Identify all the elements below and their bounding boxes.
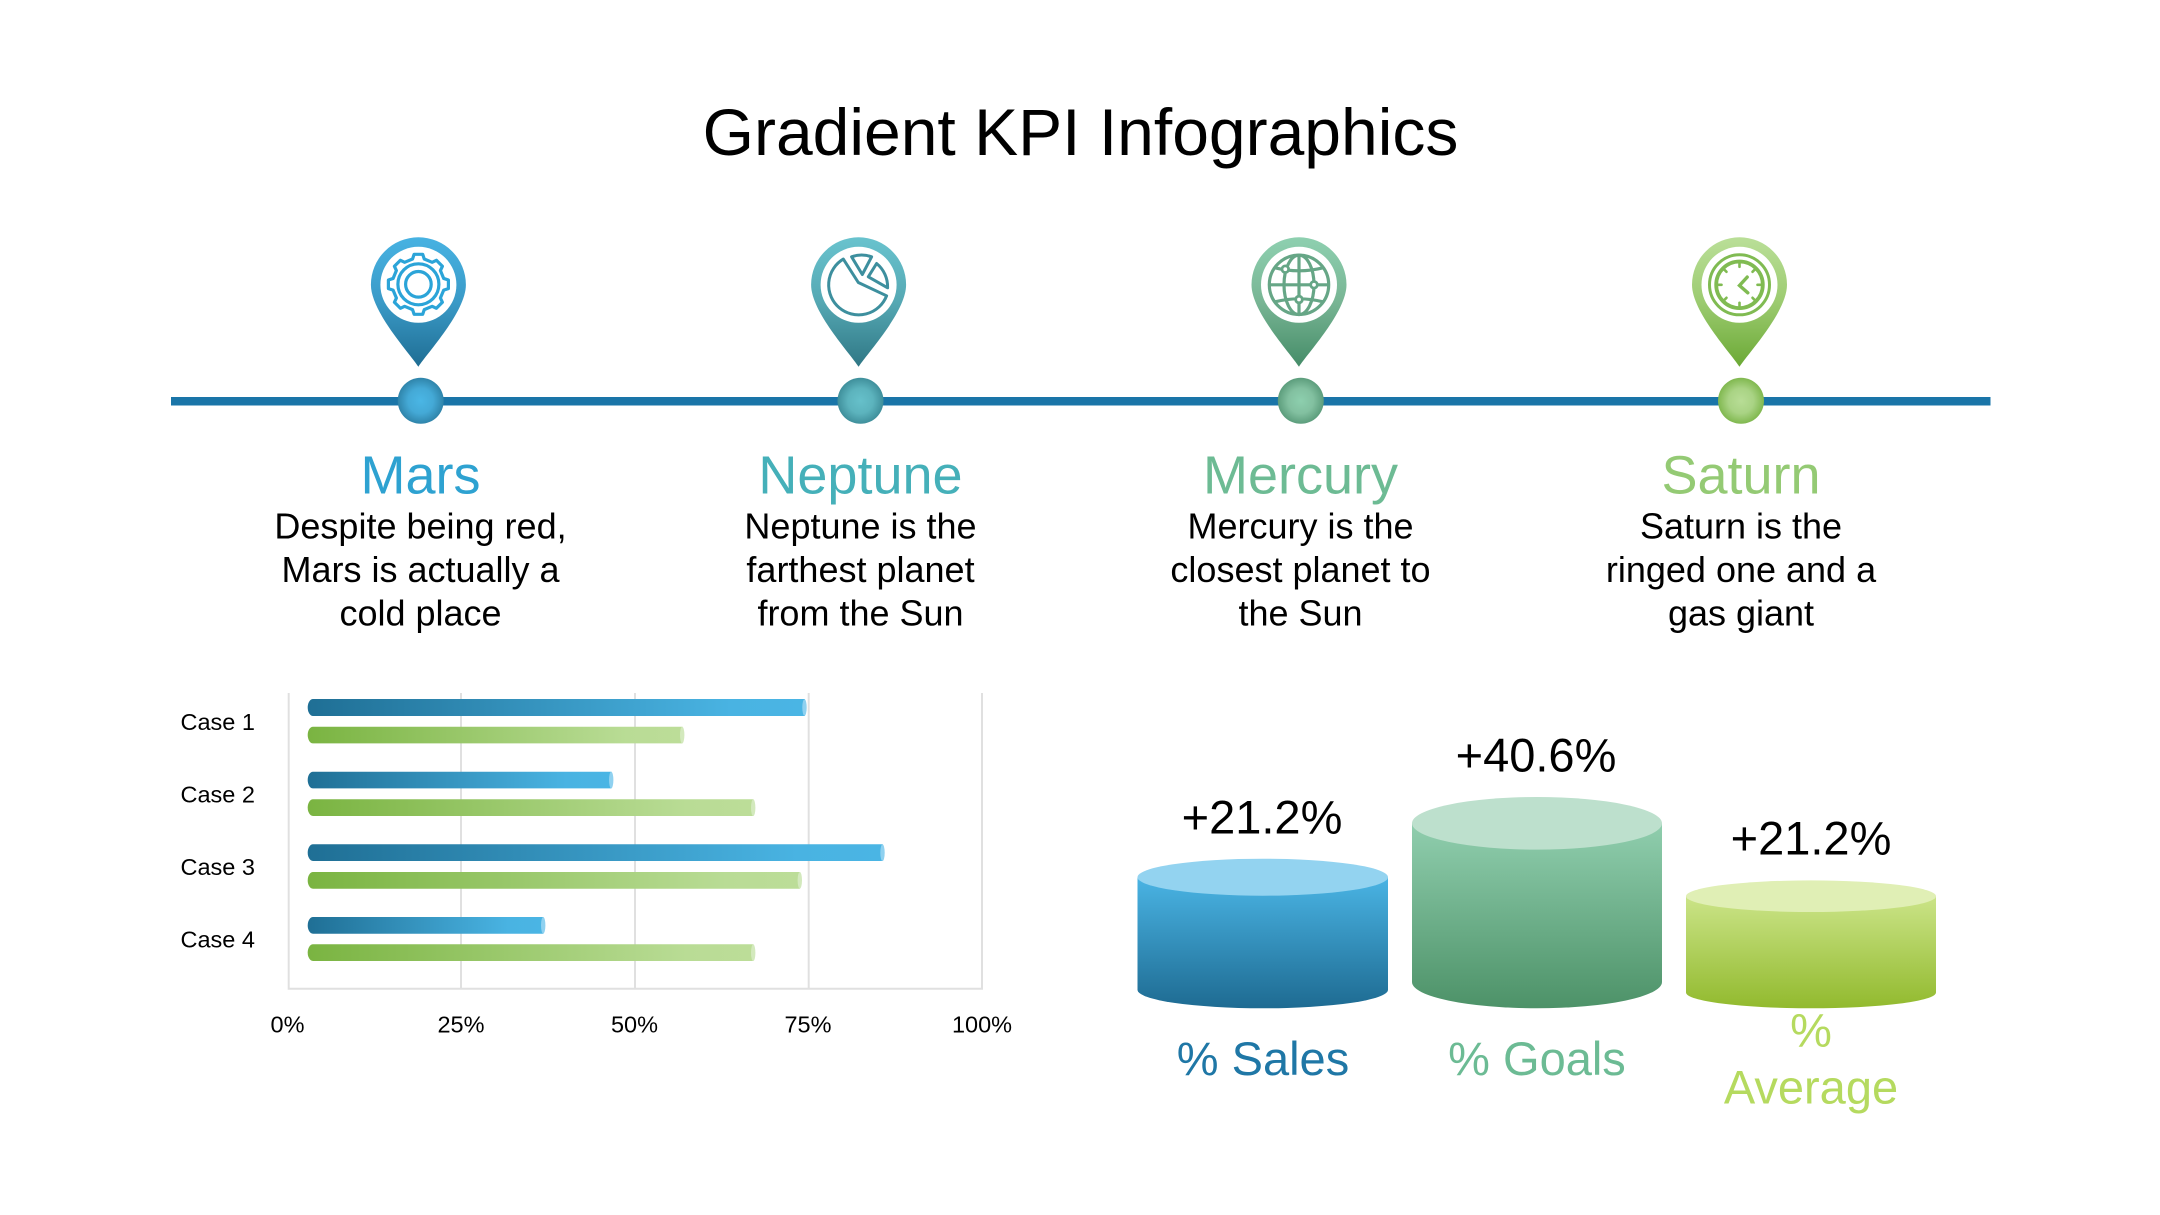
text: Mercury description: Mercury is the [1187,506,1414,547]
panel: Mercury [1170,237,1431,633]
text: Mars description: Mars is actually a [281,549,561,590]
cylinder: Average: +21.2% [1731,811,1891,864]
cylinder: Goals: +40.6% [1456,729,1616,782]
heading: Mars: Mars [360,445,480,505]
marker: Mercury dot [1278,378,1324,424]
cylinder: Average [1686,811,1936,1113]
heading: Saturn: Saturn [1661,445,1821,505]
axis labels: 50% [611,1012,658,1038]
icon: Mars pin with gear [371,237,466,367]
timeline line [171,397,1990,406]
panel: Neptune [744,237,977,633]
bars: Case 1 [308,699,807,743]
category labels: Case 3 [180,854,255,880]
heading: Neptune: Neptune [758,445,963,505]
cylinder: Sales [1138,790,1388,1085]
cylinder: Average: % [1790,1004,1832,1057]
category labels: Case 1 [180,709,255,735]
text: Saturn description: Saturn is the [1640,506,1842,547]
cylinder: Average: Average [1724,1060,1898,1113]
icon: Mercury pin with globe [1252,237,1346,367]
cylinder chart [1138,729,1936,1113]
axis labels: 100% [952,1012,1012,1038]
bars: Case 4 [308,917,755,961]
text: Mercury description: closest planet to [1170,549,1431,590]
axis labels: 0% [271,1012,305,1038]
axis labels [271,1012,1012,1038]
bars: Case 3 [308,844,885,889]
text: Neptune description: farthest planet [746,549,975,590]
bars: Case 2 [308,772,755,816]
text: Mars description: Despite being red, [274,506,567,547]
category labels: Case 4 [180,926,255,952]
icon: Neptune pin with pie chart [811,237,906,367]
text: Neptune description: Neptune is the [744,506,977,547]
text: Neptune description: from the Sun [757,592,964,633]
marker: Neptune dot [838,378,884,424]
bar chart [180,693,1012,1038]
cylinder: Goals: % Goals [1448,1032,1626,1085]
axis labels: 75% [784,1012,832,1038]
text: Saturn description: ringed one and a [1606,549,1877,590]
marker: Saturn dot [1718,378,1764,424]
category labels [180,709,255,952]
panel: Saturn [1606,237,1877,633]
text: Mercury description: the Sun [1238,592,1363,633]
panel: Mars [274,237,567,633]
cylinder: Sales: +21.2% [1182,790,1342,843]
category labels: Case 2 [180,782,255,808]
marker: Mars dot [398,378,444,424]
axis labels: 25% [437,1012,485,1038]
text: Saturn description: gas giant [1668,592,1814,633]
icon: Saturn pin with clock [1692,237,1787,367]
cylinder: Sales: % Sales [1177,1032,1349,1085]
cylinder: Goals [1412,729,1662,1085]
title: Gradient KPI Infographics [703,95,1458,169]
heading: Mercury: Mercury [1203,445,1398,505]
text: Mars description: cold place [339,592,502,633]
